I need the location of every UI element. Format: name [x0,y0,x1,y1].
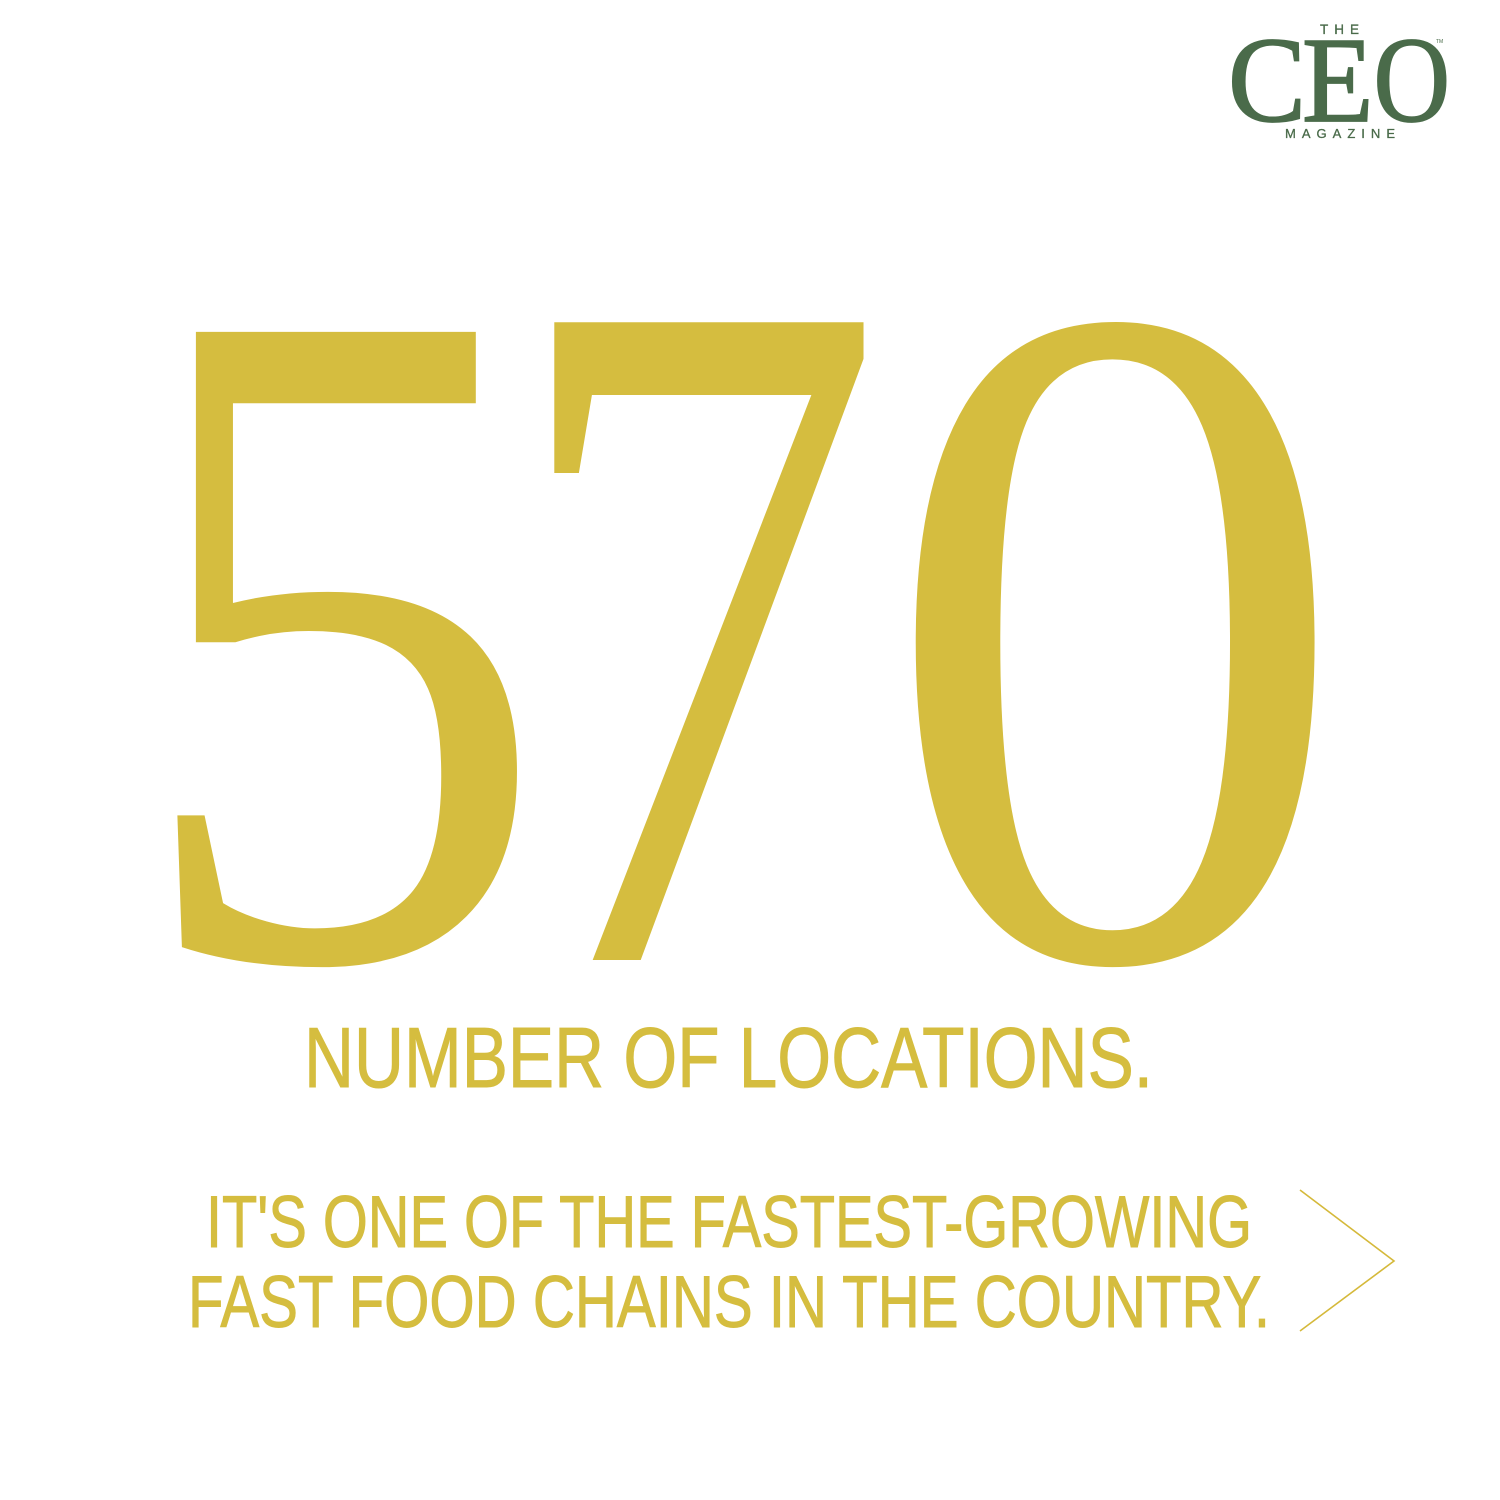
logo letters: CEO: E [1302,12,1373,148]
big number: 570 [128,93,1350,1172]
big number: 570: 5 [128,106,550,1165]
logo letters: CEO [1228,12,1450,148]
logo letters: CEO: O [1374,12,1450,148]
big number: 570: 7 [504,93,886,1172]
logo: The CEO Magazine [1228,12,1450,148]
logo trademark: TM [1436,39,1443,45]
arrow: next [1300,1190,1394,1331]
logo word: MAGAZINE: MAGAZINE [1285,126,1395,141]
logo letters: CEO: C [1228,12,1306,148]
big number: 570: 0 [880,107,1350,1165]
description text: IT'S ONE OF THE FASTEST-GROWING [206,1182,1252,1263]
caption: number of locations: NUMBER OF LOCATIONS. [304,1011,1153,1106]
description text [188,1182,1270,1343]
logo word: THE: THE [1320,22,1359,37]
